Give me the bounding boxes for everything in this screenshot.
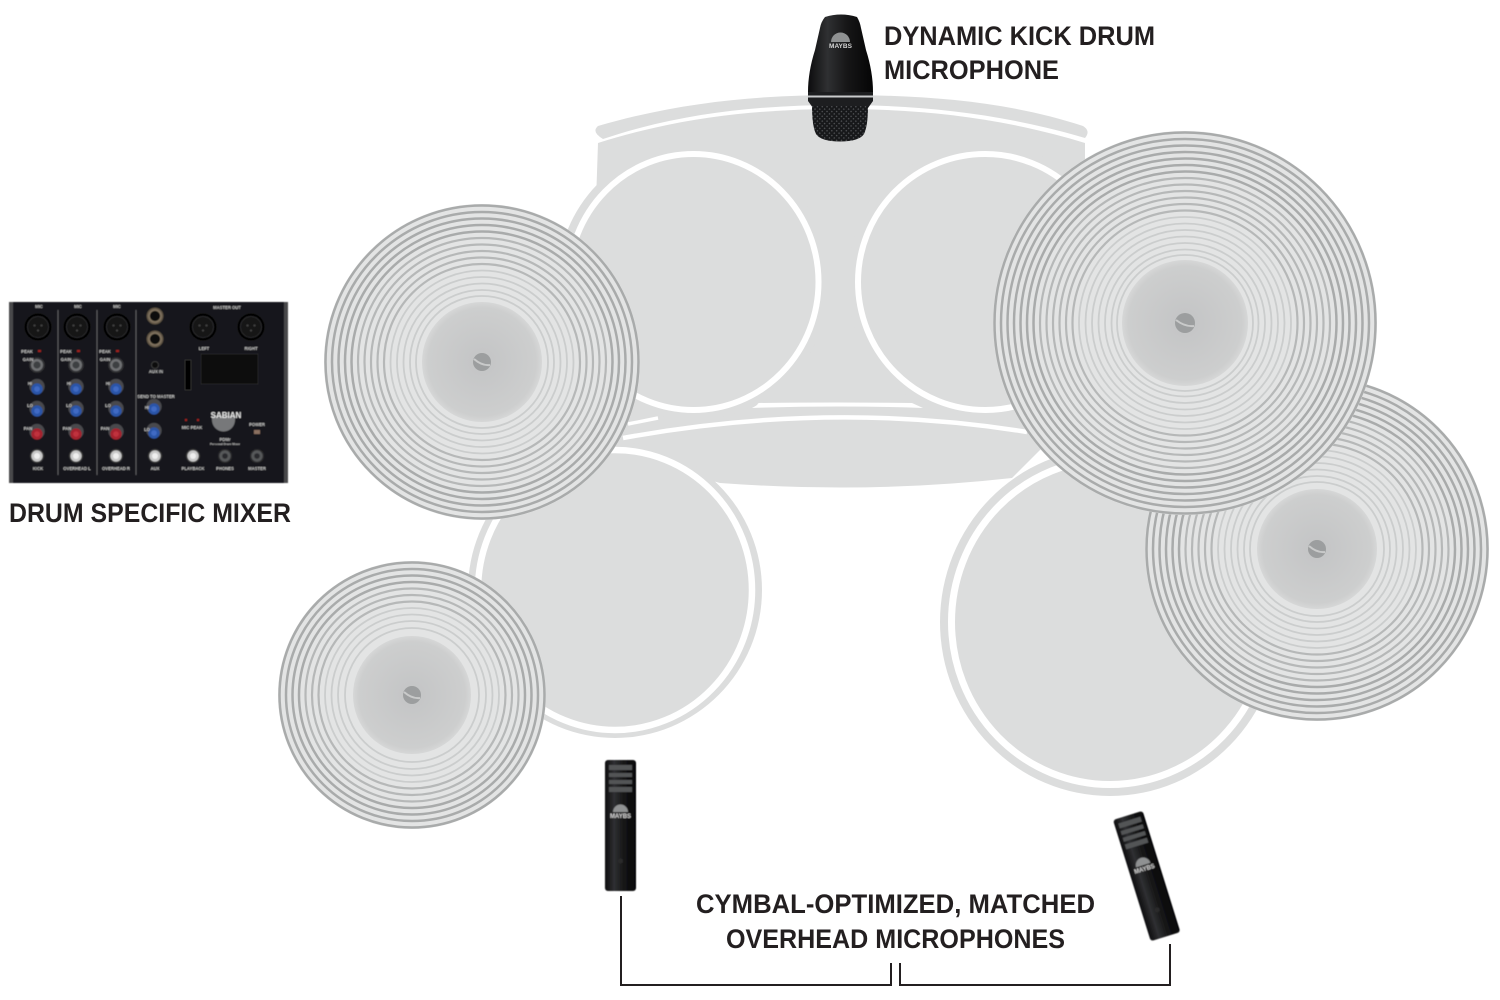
mic body — [1113, 811, 1180, 941]
mixer labels: RIGHT — [244, 346, 258, 351]
mic slots — [1118, 817, 1148, 849]
aux input — [152, 362, 158, 368]
mixer labels: Personal Drum Mixer — [210, 442, 241, 446]
mic logo: MAYBS — [610, 814, 631, 820]
mixer labels: MIC — [35, 304, 43, 309]
mixer labels: PHONES — [216, 466, 234, 471]
dynamic kick drum microphone — [808, 14, 873, 142]
mixer labels: MIC PEAK — [182, 425, 202, 430]
connector bracket: right microphone to label — [900, 944, 1170, 985]
short hoop highlight left — [628, 418, 658, 424]
mic body — [808, 14, 873, 92]
mixer labels: LO — [27, 403, 34, 408]
label: kick microphone: MICROPHONE — [884, 55, 1059, 85]
left floor tom — [468, 442, 762, 738]
mixer chassis — [9, 302, 288, 483]
mic slots — [609, 765, 632, 792]
mixer labels: SABIAN — [211, 411, 242, 420]
drum kit silhouette — [468, 95, 1280, 796]
mixer labels: HI — [28, 381, 32, 386]
mixer labels: SEND TO MASTER — [137, 394, 175, 399]
mixer labels: AUX — [151, 466, 160, 471]
cymbal: upper right — [993, 131, 1377, 515]
mixer labels: MIC — [74, 304, 82, 309]
label: overhead microphones: CYMBAL-OPTIMIZED, MATCHED — [696, 889, 1095, 919]
mixer side edges — [9, 302, 288, 483]
right rack tom — [847, 144, 1123, 420]
mixer labels: MASTER OUT — [213, 305, 241, 310]
mic grille — [812, 106, 868, 142]
mixer labels: LEFT — [199, 346, 210, 351]
mixer labels: AUX IN — [149, 369, 163, 374]
mixer labels: LO — [105, 403, 112, 408]
mixer labels: PLAYBACK — [182, 466, 204, 471]
mixer labels: PDMr — [220, 437, 231, 442]
label: kick microphone: DYNAMIC KICK DRUM — [884, 21, 1155, 51]
channel knobs — [29, 357, 264, 463]
mixer labels: PEAK — [21, 349, 33, 354]
bass drum hoop line — [623, 417, 1027, 438]
mixer labels: PEAK — [60, 349, 72, 354]
mixer labels: MASTER — [248, 466, 266, 471]
brand disc — [212, 416, 235, 432]
mic collar — [808, 92, 873, 108]
label: mixer: DRUM SPECIFIC MIXER — [9, 498, 291, 528]
mixer labels: PAN — [101, 426, 109, 431]
display screen — [201, 354, 258, 384]
mixer labels: HI — [106, 381, 110, 386]
mixer labels: GAIN — [23, 357, 33, 362]
peak LEDs — [38, 350, 199, 421]
cymbal: lower left — [278, 561, 546, 829]
mixer labels: OVERHEAD L — [63, 466, 91, 471]
label: overhead microphones: OVERHEAD MICROPHONES — [726, 924, 1065, 954]
mixer labels: PAN — [63, 426, 71, 431]
mixer labels: HI — [145, 405, 149, 410]
cymbal: upper left — [324, 204, 640, 520]
short hoop highlight centre — [752, 402, 923, 408]
mixer labels: KICK — [33, 466, 43, 471]
mixer labels: HI — [67, 381, 71, 386]
mixer labels: LO — [66, 403, 73, 408]
jack inputs — [146, 308, 164, 348]
mixer labels: OVERHEAD R — [102, 466, 130, 471]
mic body — [605, 760, 636, 891]
mixer labels: MIC — [113, 304, 121, 309]
mic logo: MAYBS — [829, 43, 853, 50]
mixer labels: LO — [144, 427, 151, 432]
mixer labels — [21, 304, 266, 471]
mixer labels: GAIN — [100, 357, 110, 362]
connector bracket: left microphone to label — [621, 896, 891, 985]
mic logo: MAYBS — [1134, 864, 1156, 876]
overhead microphone right — [1113, 811, 1180, 941]
mixer labels: GAIN — [61, 357, 71, 362]
mixer labels: PAN — [24, 426, 32, 431]
bass drum shell — [590, 109, 1085, 487]
drum specific mixer — [9, 302, 288, 483]
mixer labels: PEAK — [99, 349, 111, 354]
cymbal: lower right — [1145, 377, 1489, 721]
left rack tom — [558, 144, 830, 420]
collar highlight — [808, 96, 873, 98]
right floor tom — [940, 448, 1280, 796]
XLR inputs — [24, 314, 264, 340]
overhead microphone left — [605, 760, 636, 891]
mic screw — [1154, 907, 1160, 913]
mic screw — [618, 858, 623, 864]
channel dividers — [58, 310, 136, 475]
SD card slot — [185, 360, 191, 390]
power switch — [254, 430, 260, 434]
bass drum rim — [595, 95, 1088, 139]
mixer labels: POWER — [249, 422, 265, 427]
